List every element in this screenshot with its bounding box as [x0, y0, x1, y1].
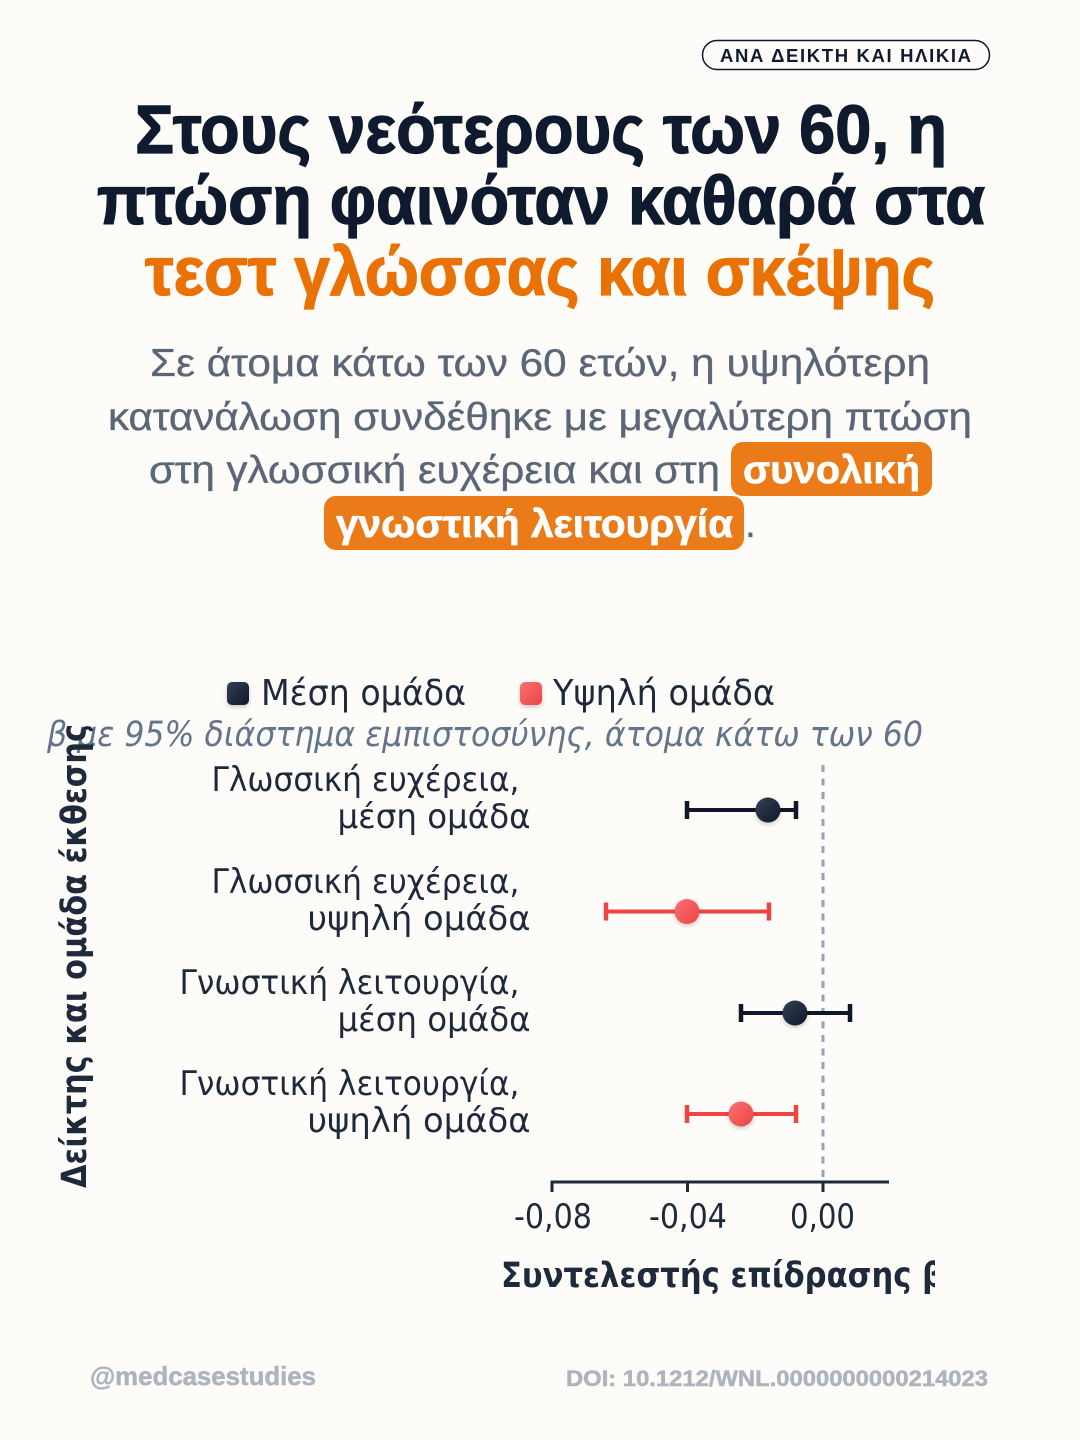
- subtitle text block: γνωστική λειτουργία: [336, 503, 733, 546]
- title: Στους νεότερους των 60, η: [135, 91, 947, 168]
- row labels: μέση ομάδα: [338, 1000, 530, 1040]
- row: language fluency, medium group: [687, 798, 796, 822]
- badge: by indicator and age: [702, 40, 990, 70]
- x axis: -0,08: [514, 1197, 592, 1237]
- subtitle text block: .: [745, 503, 756, 546]
- row: language fluency, high group: [606, 899, 769, 924]
- title: [97, 91, 985, 310]
- row: cognitive function, high group: [687, 1102, 796, 1126]
- forest plot: [606, 765, 850, 1180]
- footer handle: @medcasestudies: [90, 1361, 316, 1391]
- row: cognitive function, medium group: [741, 1000, 850, 1026]
- subtitle text block: [108, 342, 972, 550]
- subtitle text block: Σε άτομα κάτω των 60 ετών, η υψηλότερη: [150, 342, 930, 385]
- row labels: Γνωστική λειτουργία,: [180, 1064, 520, 1104]
- title: πτώση φαινόταν καθαρά στα: [97, 162, 985, 239]
- row labels: [180, 760, 530, 1141]
- badge: by indicator and age: ΑΝΑ ΔΕΙΚΤΗ ΚΑΙ ΗΛΙΚΙΑ: [720, 45, 971, 66]
- legend: Μέση ομάδα: [261, 673, 466, 714]
- row labels: Γλωσσική ευχέρεια,: [212, 760, 520, 800]
- subtitle text block: συνολική: [743, 449, 920, 492]
- row labels: μέση ομάδα: [338, 797, 530, 837]
- x axis title: Συντελεστής επίδρασης β: [501, 1256, 944, 1296]
- x axis: [514, 1182, 889, 1237]
- legend: Υψηλή ομάδα: [552, 673, 775, 714]
- row labels: Γλωσσική ευχέρεια,: [212, 862, 520, 902]
- row labels: Γνωστική λειτουργία,: [180, 963, 520, 1003]
- row labels: υψηλή ομάδα: [308, 899, 530, 939]
- title: τεστ γλώσσας και σκέψης: [145, 233, 935, 310]
- chart subtitle: β με 95% διάστημα εμπιστοσύνης, άτομα κάτω των 60: [46, 715, 923, 755]
- x axis: -0,04: [649, 1197, 727, 1237]
- x axis: 0,00: [790, 1197, 855, 1237]
- legend: [227, 673, 775, 714]
- row labels: υψηλή ομάδα: [308, 1101, 530, 1141]
- subtitle text block: κατανάλωση συνδέθηκε με μεγαλύτερη πτώση: [108, 396, 972, 439]
- footer DOI: DOI: 10.1212/WNL.0000000000214023: [566, 1366, 988, 1391]
- subtitle text block: στη γλωσσική ευχέρεια και στη: [149, 449, 720, 492]
- y axis title: Δείκτης και ομάδα έκθεσης: [55, 724, 95, 1188]
